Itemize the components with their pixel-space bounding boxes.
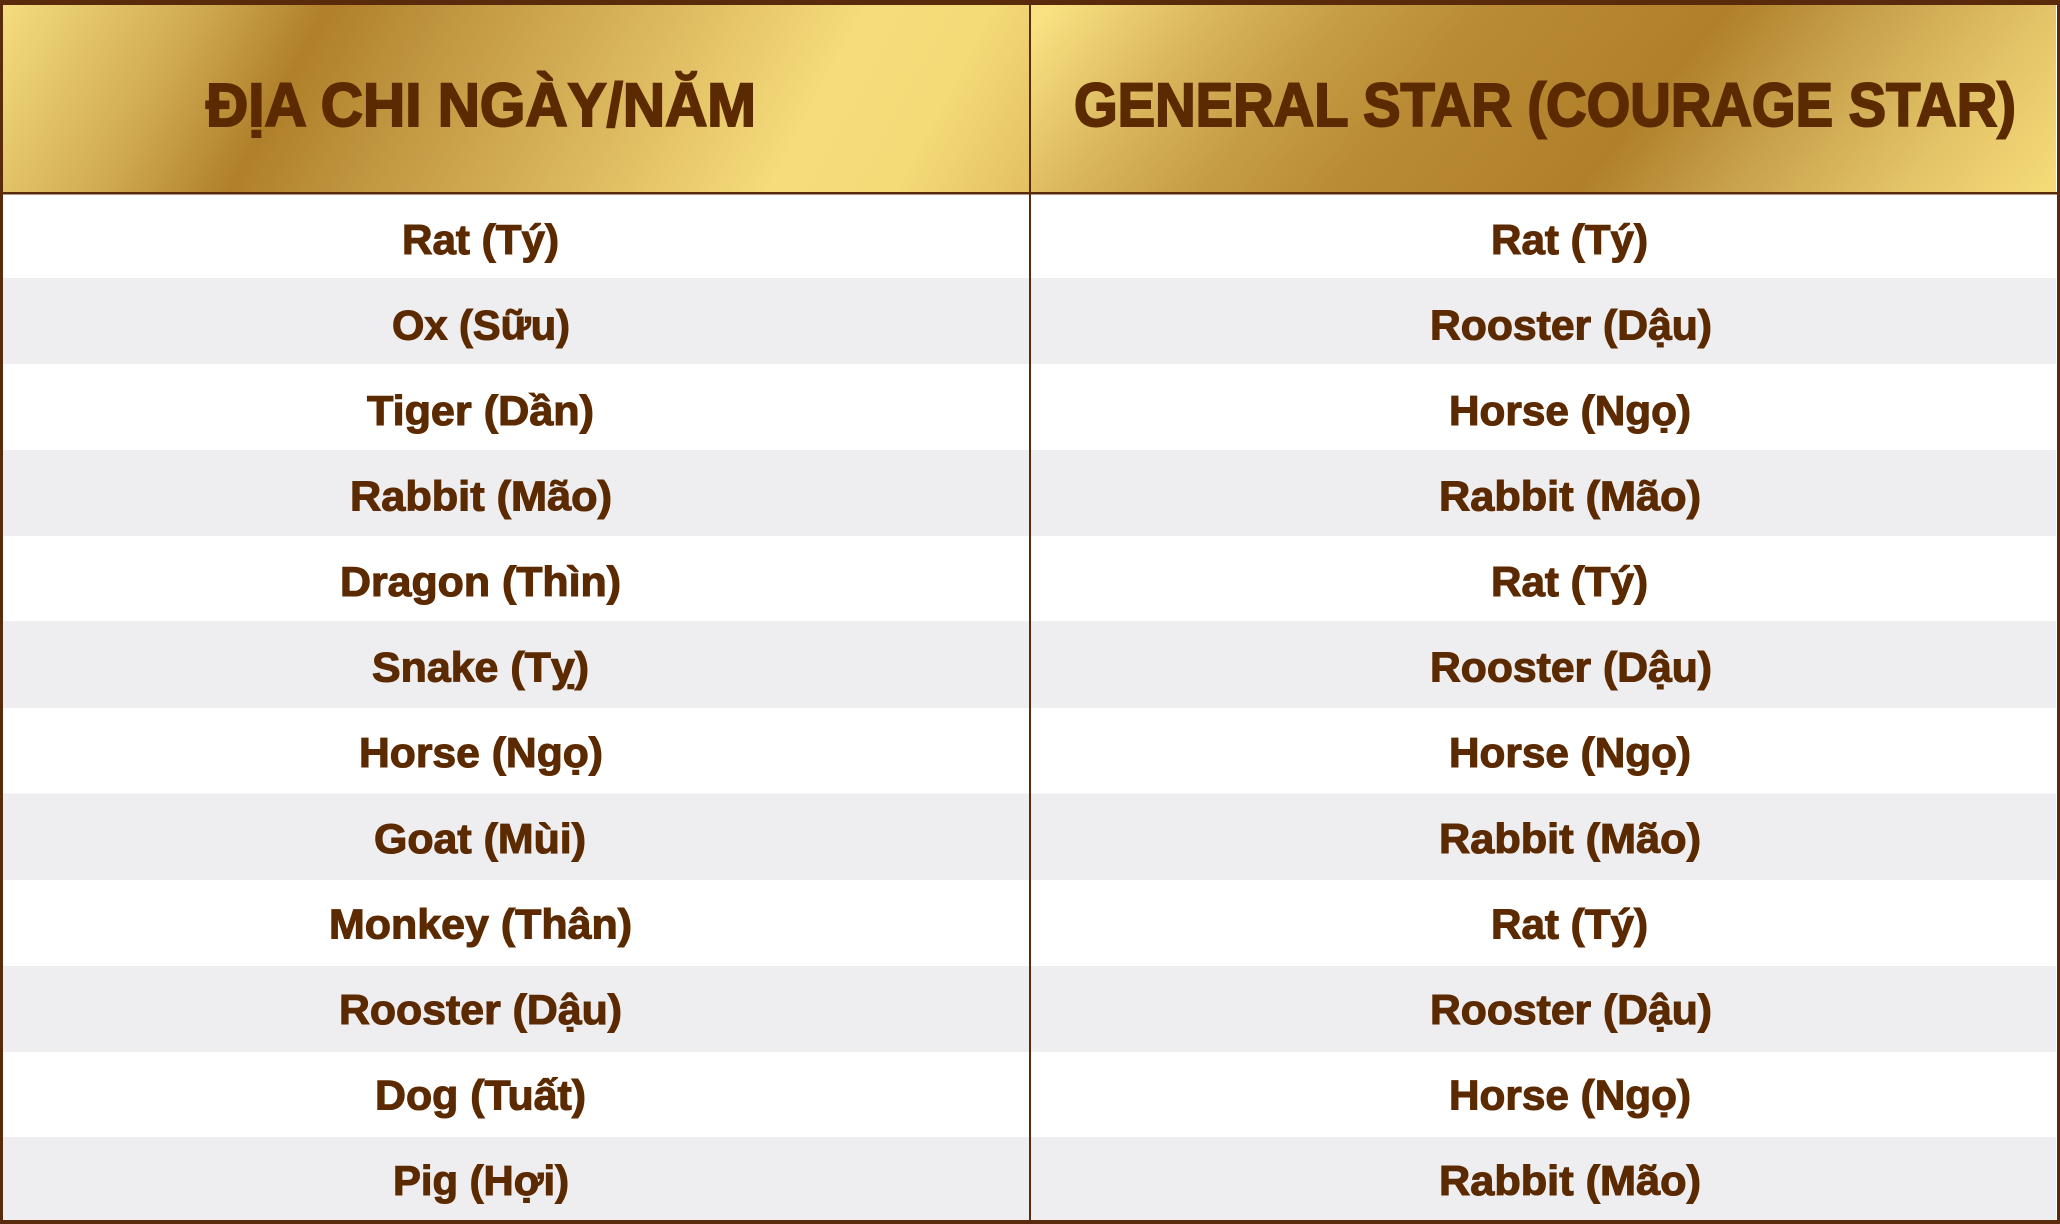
row: Monkey: Monkey (Thân) [329,900,632,947]
row: Dog: Dog (Tuất) [375,1072,586,1118]
row: Rooster: Rooster (Dậu) [339,986,622,1033]
row: Pig: Pig (Hợi) [393,1157,569,1204]
row: Rabbit [3,450,2056,536]
row: Snake [3,621,2056,708]
row: Monkey: Rat (Tý) [1491,900,1648,947]
row: Dragon: Rat (Tý) [1491,558,1648,605]
row: Rooster: Rooster (Dậu) [1430,986,1712,1033]
row: Rat: Rat (Tý) [402,216,559,263]
row: Tiger: Horse (Ngọ) [1449,387,1691,434]
row: Horse: Horse (Ngọ) [359,729,603,776]
row: Dragon [3,536,2056,621]
row: Tiger: Tiger (Dần) [367,387,594,434]
row: Pig [3,1137,2056,1220]
row: Pig: Rabbit (Mão) [1439,1157,1701,1204]
row: Tiger [3,364,2056,450]
header cell: general star [1031,5,2056,192]
row: Horse [3,708,2056,794]
row: Rat [3,194,2056,278]
row: Rabbit: Rabbit (Mão) [350,473,612,520]
row: Monkey [3,880,2056,966]
row: Goat: Rabbit (Mão) [1439,815,1701,862]
table header [3,5,2056,192]
row: Rooster [3,966,2056,1052]
row: Goat: Goat (Mùi) [374,815,586,862]
row: Horse: Horse (Ngọ) [1449,729,1691,776]
row: Rat: Rat (Tý) [1491,216,1648,263]
row: Dog: Horse (Ngọ) [1449,1072,1691,1118]
row: Dog [3,1052,2056,1137]
row: Snake: Snake (Tỵ) [372,644,589,690]
row: Ox: Rooster (Dậu) [1430,302,1712,348]
row: Dragon: Dragon (Thìn) [340,558,621,605]
row: Ox: Ox (Sữu) [392,302,570,348]
row: Goat [3,794,2056,880]
row: Rabbit: Rabbit (Mão) [1439,473,1701,520]
row: Ox [3,278,2056,364]
header cell: day/year earthly branch [3,5,1029,192]
header cell: day/year earthly branch: ĐỊA CHI NGÀY/NĂM [206,71,756,139]
row: Snake: Rooster (Dậu) [1430,644,1712,690]
